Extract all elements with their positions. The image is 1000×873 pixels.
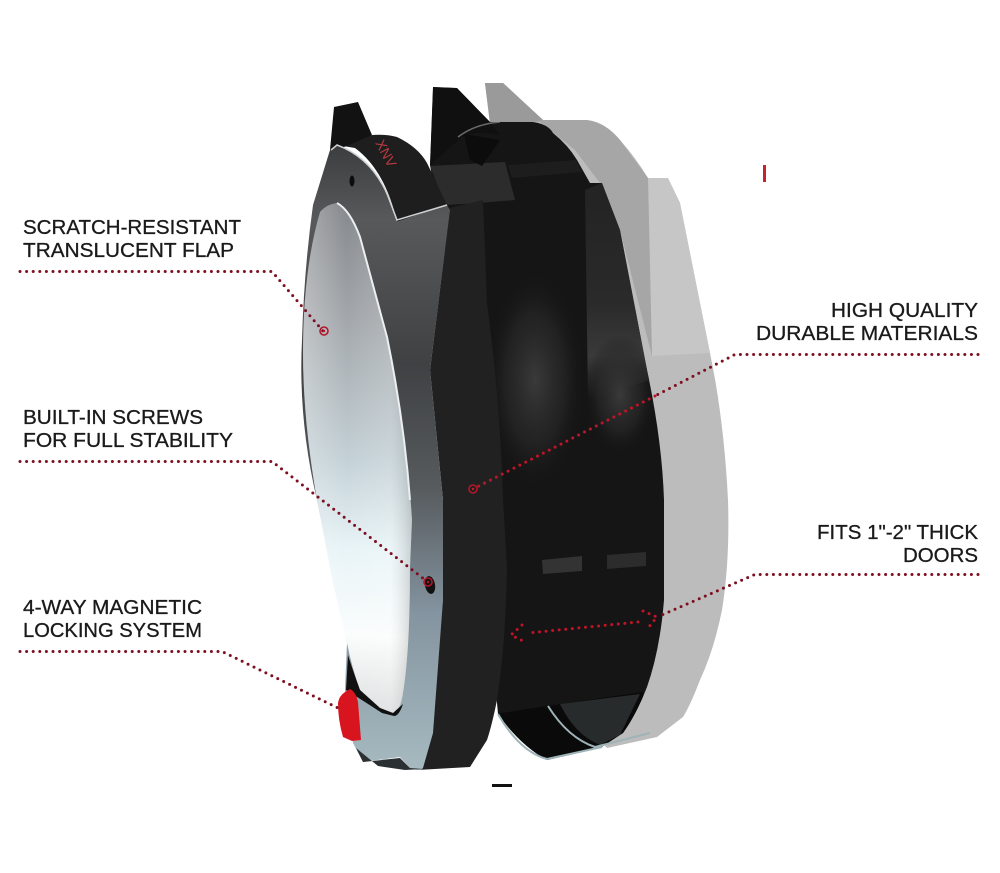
- logo on band: XNV: [372, 137, 400, 170]
- callout: magnetic locking: 4-WAY MAGNETIC: [23, 597, 202, 619]
- callout: scratch-resistant flap: TRANSLUCENT FLAP: [23, 240, 234, 262]
- callout: scratch-resistant flap: [20, 217, 328, 335]
- callout: durable materials: HIGH QUALITY: [831, 300, 978, 322]
- callout: door thickness: FITS 1"-2" THICK: [817, 522, 979, 544]
- black front band: [417, 200, 507, 770]
- dark middle housing: [425, 80, 670, 770]
- callout: door thickness: DOORS: [903, 545, 978, 567]
- callout: door thickness: [511, 522, 979, 642]
- callout: durable materials: DURABLE MATERIALS: [756, 323, 978, 345]
- red tick mark: [763, 165, 766, 182]
- arrow: thickness span: [511, 611, 657, 642]
- callout: magnetic locking: [20, 597, 338, 708]
- red magnetic lock: [338, 689, 361, 741]
- lens: translucent flap: [303, 203, 412, 716]
- callout: scratch-resistant flap: SCRATCH-RESISTANT: [23, 217, 241, 239]
- ear: front: [330, 102, 372, 150]
- top black band of front ring: [337, 135, 447, 222]
- black tick mark: [492, 784, 512, 787]
- rear frame: light grey translucent: [485, 83, 728, 748]
- ring highlight edge: [331, 145, 447, 220]
- grey front ring: [301, 145, 450, 770]
- product: door flap: [301, 80, 728, 770]
- callout: built-in screws: BUILT-IN SCREWS: [23, 407, 203, 429]
- callout: built-in screws: FOR FULL STABILITY: [23, 430, 233, 452]
- rim lines at base: [498, 706, 650, 759]
- callout: magnetic locking: LOCKING SYSTEM: [23, 620, 202, 642]
- callout: built-in screws: [20, 407, 432, 586]
- screw holes: [350, 176, 436, 595]
- callout: durable materials: [469, 300, 978, 493]
- base shadow: [356, 748, 423, 770]
